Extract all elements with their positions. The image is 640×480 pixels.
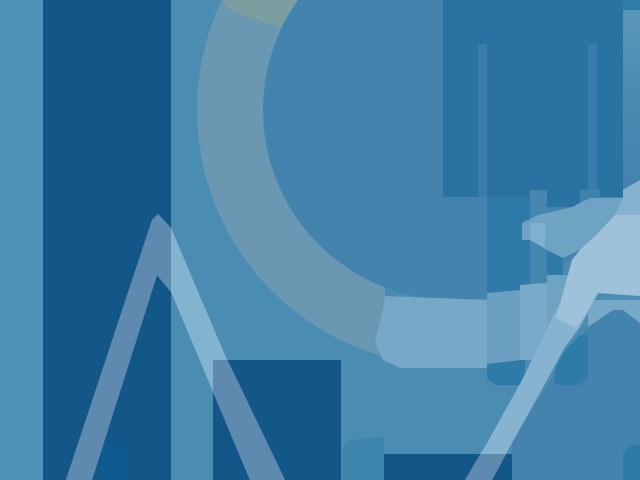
dark rectangle bottom — [384, 454, 512, 480]
star: lower strip — [588, 300, 640, 327]
dark rectangle panel — [443, 0, 623, 293]
left column — [0, 0, 43, 480]
star: mid-tone body — [522, 180, 640, 262]
small block bottom centre — [343, 437, 384, 480]
star: pale top right — [615, 180, 640, 215]
dark patch between line and block — [555, 335, 588, 385]
ring: light section — [375, 296, 487, 368]
ring: lighter section — [520, 283, 547, 360]
ring: end section — [540, 275, 580, 360]
peak line — [66, 214, 285, 480]
ring: grey section — [197, 0, 385, 356]
ring top green tip — [222, 0, 298, 27]
dark rectangle centre — [213, 360, 341, 480]
lower dark patch under ring — [487, 360, 525, 385]
star: bright core — [556, 215, 640, 328]
rising line — [465, 293, 598, 480]
lower right block — [512, 310, 640, 480]
star: pale left tip — [530, 223, 545, 248]
ring: tinted section — [487, 290, 520, 364]
bottom right corner patch — [623, 445, 640, 480]
right edge strip — [623, 10, 640, 185]
dark vertical band — [43, 0, 171, 480]
top right sliver — [600, 0, 640, 10]
inner disc — [263, 0, 640, 300]
